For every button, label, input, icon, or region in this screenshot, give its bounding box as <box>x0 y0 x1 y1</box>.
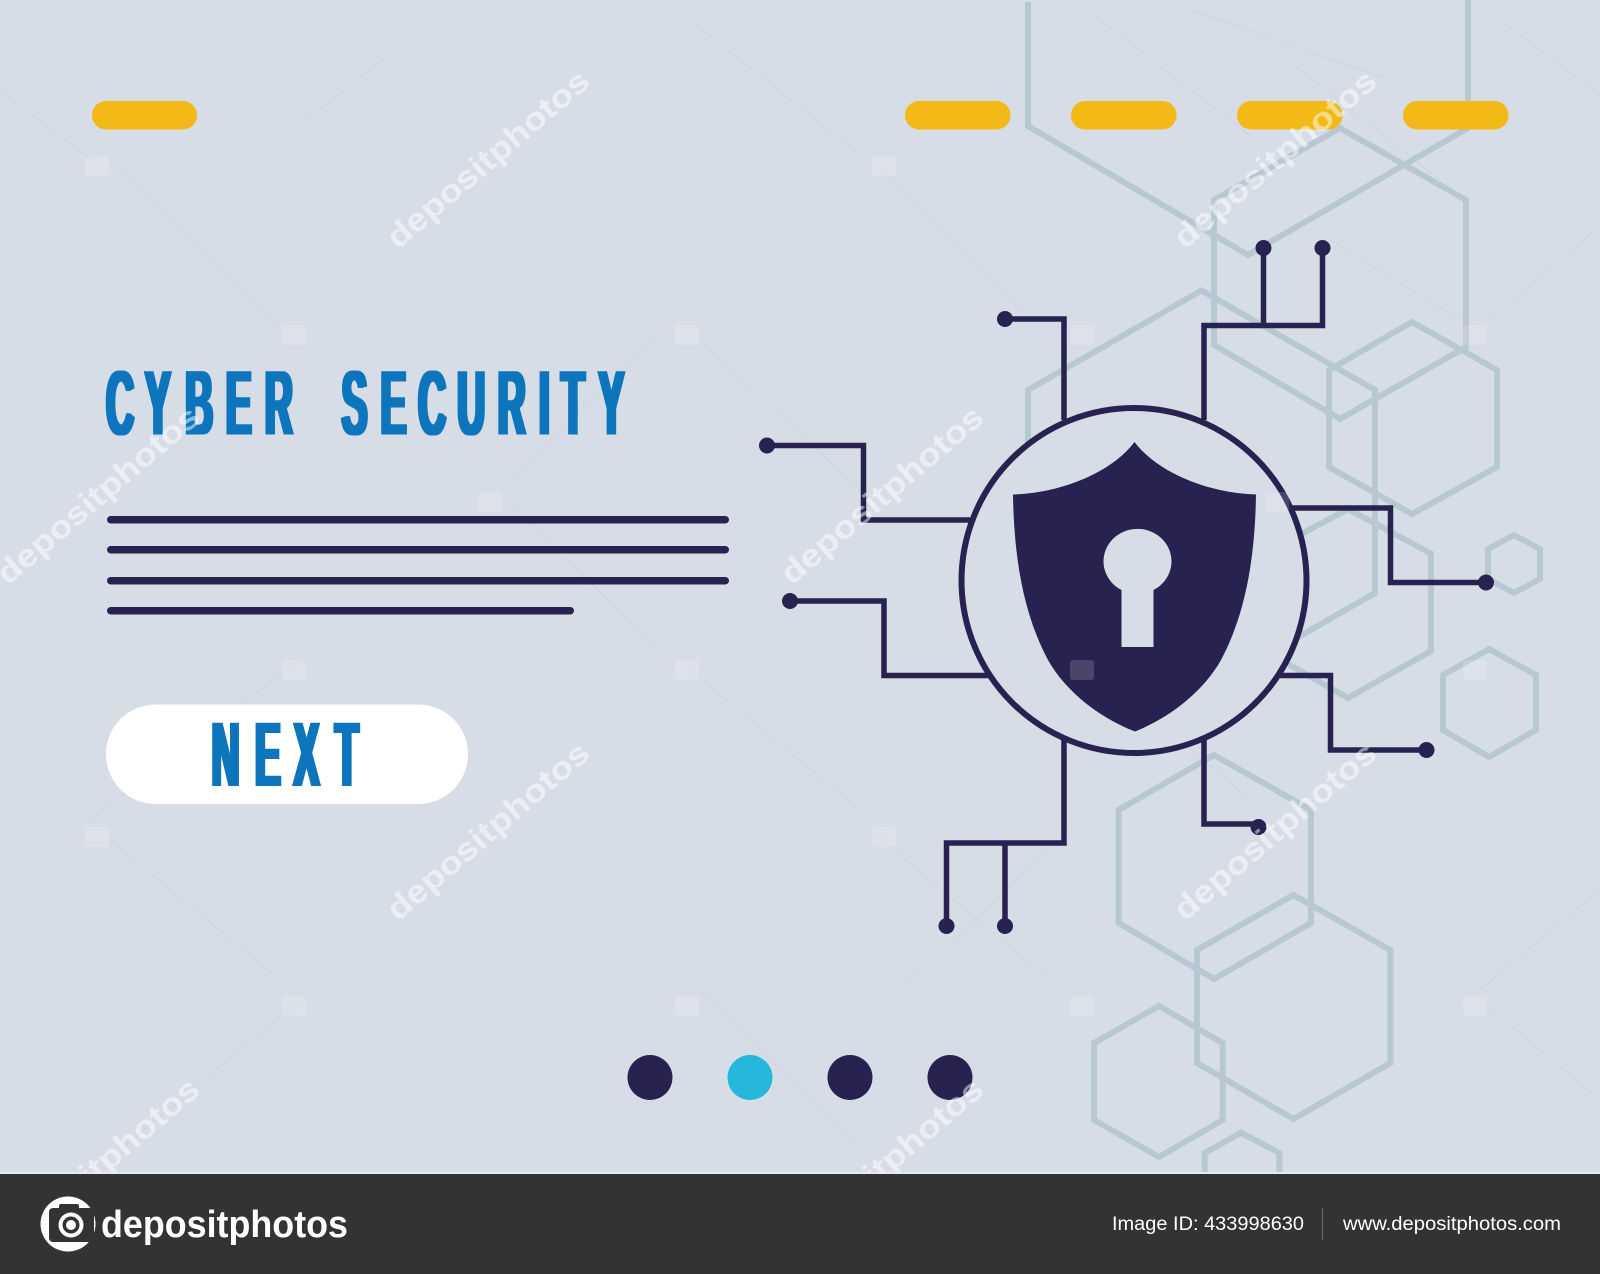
website url: www.depositphotos.com <box>1342 1214 1561 1235</box>
watermark text: depositphotos <box>379 734 596 927</box>
image id: Image ID: 433998630 <box>1112 1214 1304 1235</box>
next button <box>106 703 468 806</box>
central circle <box>962 408 1306 753</box>
watermark cameras <box>85 156 1487 1016</box>
title: CYBER SECURITY <box>106 351 624 454</box>
watermark text: depositphotos <box>1166 734 1383 927</box>
background hexagon network <box>1028 0 1540 1175</box>
watermark text: depositphotos <box>1166 62 1383 255</box>
watermark text: depositphotos <box>379 62 596 255</box>
watermark text: depositphotos <box>773 1070 990 1263</box>
body text lines <box>107 516 729 614</box>
yellow pill: left <box>92 101 197 130</box>
yellow pills: right group <box>905 101 1508 130</box>
circuit end dots <box>759 240 1494 934</box>
pagination dots <box>628 1055 972 1100</box>
footer bar <box>0 1172 1600 1274</box>
circuit wires <box>767 248 1486 926</box>
next button: NEXT <box>212 703 359 806</box>
icon: shield with keyhole <box>1013 442 1256 732</box>
watermark text: depositphotos <box>773 398 990 591</box>
logo wordmark: depositphotos <box>101 1204 348 1246</box>
logo icon: camera <box>40 1196 96 1252</box>
